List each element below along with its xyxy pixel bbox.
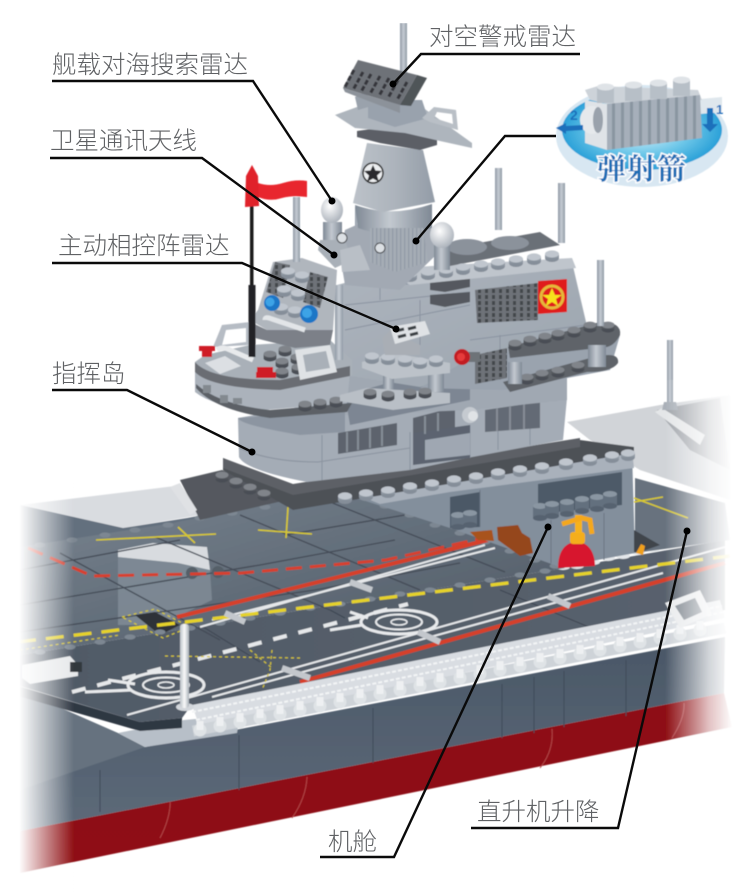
white radome xyxy=(430,222,454,270)
yellow dashed centre line xyxy=(18,556,730,642)
leader: catapult inset xyxy=(412,136,556,244)
block studs xyxy=(597,76,690,103)
mid body block xyxy=(345,350,567,415)
label: command island: 指挥岛 xyxy=(52,360,126,388)
helicopter spot front xyxy=(85,672,204,698)
blue knobs xyxy=(264,295,318,323)
label: air search radar: 对空警戒雷达 xyxy=(429,23,576,51)
red knobs xyxy=(199,346,276,378)
runway crossings xyxy=(225,582,570,678)
label: hangar: 机舱 xyxy=(328,828,377,856)
lower tower cylinder with ribbed wall xyxy=(340,204,436,290)
elevator bay xyxy=(634,478,730,555)
transparent glass deck panels xyxy=(20,493,565,655)
left edge fade xyxy=(0,380,750,896)
dark mid block xyxy=(430,277,470,307)
rear mast at flag xyxy=(293,197,300,262)
recess right xyxy=(538,472,622,514)
top mast xyxy=(400,23,407,73)
hangar wall xyxy=(353,450,635,567)
red dashed line xyxy=(28,537,488,576)
white runway lines xyxy=(127,545,725,715)
label: helicopter lift: 直升机升降 xyxy=(477,798,600,826)
label: command island xyxy=(52,360,256,456)
main wall xyxy=(337,262,586,387)
arrow 2: 2 xyxy=(570,107,578,123)
lower terrace xyxy=(340,372,450,410)
left upper platform xyxy=(195,340,352,388)
platform frame xyxy=(422,107,458,130)
label: phased array radar xyxy=(52,232,400,332)
white deck box at bow xyxy=(22,656,82,684)
satellite antenna cluster xyxy=(337,233,385,272)
right edge fade xyxy=(665,380,750,740)
label: phased array radar: 主动相控阵雷达 xyxy=(58,232,230,260)
arrow 2 xyxy=(556,107,583,134)
far deck catapult ramp xyxy=(655,340,730,470)
red stripes xyxy=(177,540,725,682)
left frame xyxy=(213,322,250,347)
far flight deck behind island xyxy=(20,340,730,550)
emblem xyxy=(538,279,567,314)
front deck mast xyxy=(176,624,194,711)
label: sea search radar xyxy=(52,51,336,204)
island base plate xyxy=(170,438,635,520)
windows xyxy=(338,402,540,465)
outer right mast xyxy=(597,260,604,326)
white stud row along deck edge xyxy=(556,535,720,570)
bridge panel xyxy=(250,258,337,348)
label: air search radar xyxy=(390,23,580,88)
red extinguisher bottle xyxy=(558,515,595,568)
command island xyxy=(195,258,620,482)
grey upper hull xyxy=(20,637,725,831)
label: sea search radar: 舰载对海搜索雷达 xyxy=(52,51,248,79)
inset title: 弹射箭 xyxy=(597,153,687,186)
left mast on deck xyxy=(355,207,362,279)
red lower hull xyxy=(20,693,732,873)
panel grilles xyxy=(266,262,290,298)
gangway lattice and handrail xyxy=(192,600,725,736)
air search radar xyxy=(343,60,427,113)
block xyxy=(580,76,702,150)
side grille low xyxy=(475,348,507,384)
phased array small radar xyxy=(382,321,430,355)
tower cone with star badge xyxy=(353,143,435,212)
small grate and tube xyxy=(205,356,241,374)
helicopter spot rear xyxy=(330,610,437,634)
label: hangar xyxy=(320,524,552,857)
upper terrace xyxy=(362,352,450,379)
island lower body xyxy=(238,385,567,482)
left lower platform xyxy=(195,366,350,410)
label: satellite antenna: 卫星通讯天线 xyxy=(50,127,197,155)
grey pole on bridge xyxy=(335,285,343,360)
recess left xyxy=(450,492,480,528)
arrow 1 xyxy=(702,102,723,132)
upper right rim xyxy=(503,322,620,392)
flight deck xyxy=(18,540,725,731)
round knob xyxy=(462,407,478,423)
flag with antenna xyxy=(245,165,307,357)
glass deck stud rows xyxy=(34,494,560,655)
ship hull xyxy=(20,637,732,873)
deck markings xyxy=(18,537,730,715)
right mast 1 xyxy=(495,168,502,230)
top deck and equipment xyxy=(293,168,604,326)
large radar grille xyxy=(475,283,538,323)
white centre dashes xyxy=(72,604,408,692)
red side knob xyxy=(454,349,480,365)
plunger knob xyxy=(580,106,604,134)
left radome dome xyxy=(318,197,352,268)
arrow 1: 1 xyxy=(716,102,723,117)
star badge xyxy=(363,163,383,183)
catapult missile inset xyxy=(556,76,728,187)
white box frame xyxy=(295,345,337,380)
brown prop xyxy=(470,525,533,556)
tower platform xyxy=(335,100,472,150)
red flag xyxy=(258,180,307,200)
white frame on deck edge xyxy=(665,590,712,628)
label: satellite antenna xyxy=(50,127,338,258)
right mast 2 xyxy=(558,183,565,243)
label: helicopter lift xyxy=(471,528,690,828)
hangar studs xyxy=(451,491,617,530)
